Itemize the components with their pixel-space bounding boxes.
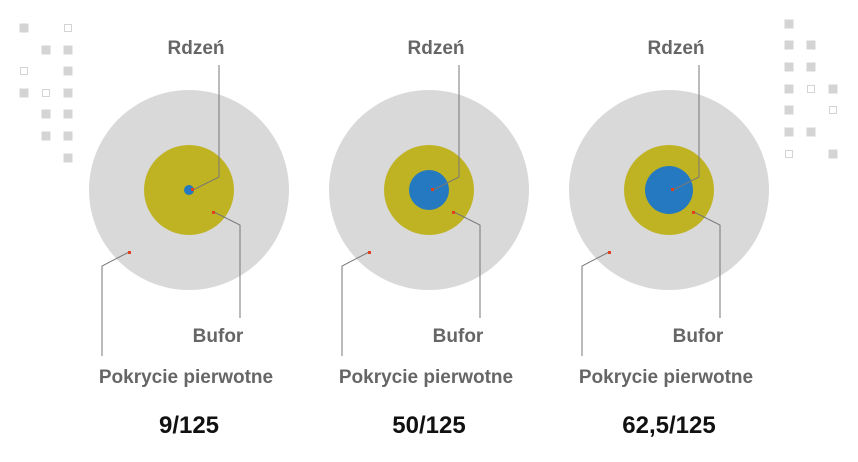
- decorative squares right: [785, 20, 837, 158]
- fiber 50/125: [329, 38, 529, 439]
- fiber 50/125: Bufor: [433, 326, 484, 347]
- fiber 62,5/125: 62,5/125: [622, 412, 716, 439]
- fiber 50/125: 50/125: [392, 412, 466, 439]
- fiber 62,5/125: [569, 38, 769, 439]
- fiber 9/125: 9/125: [159, 412, 219, 439]
- fiber 50/125: Pokrycie pierwotne: [339, 367, 513, 388]
- fiber 9/125: [89, 38, 289, 439]
- fiber 62,5/125: Bufor: [673, 326, 724, 347]
- fiber 9/125: Pokrycie pierwotne: [99, 367, 273, 388]
- fiber 9/125: Bufor: [193, 326, 244, 347]
- fiber 9/125: Rdzeń: [168, 38, 224, 59]
- fiber 62,5/125: Rdzeń: [648, 38, 704, 59]
- decorative squares left: [20, 24, 72, 162]
- fiber 50/125: Rdzeń: [408, 38, 464, 59]
- fiber 62,5/125: Pokrycie pierwotne: [579, 367, 753, 388]
